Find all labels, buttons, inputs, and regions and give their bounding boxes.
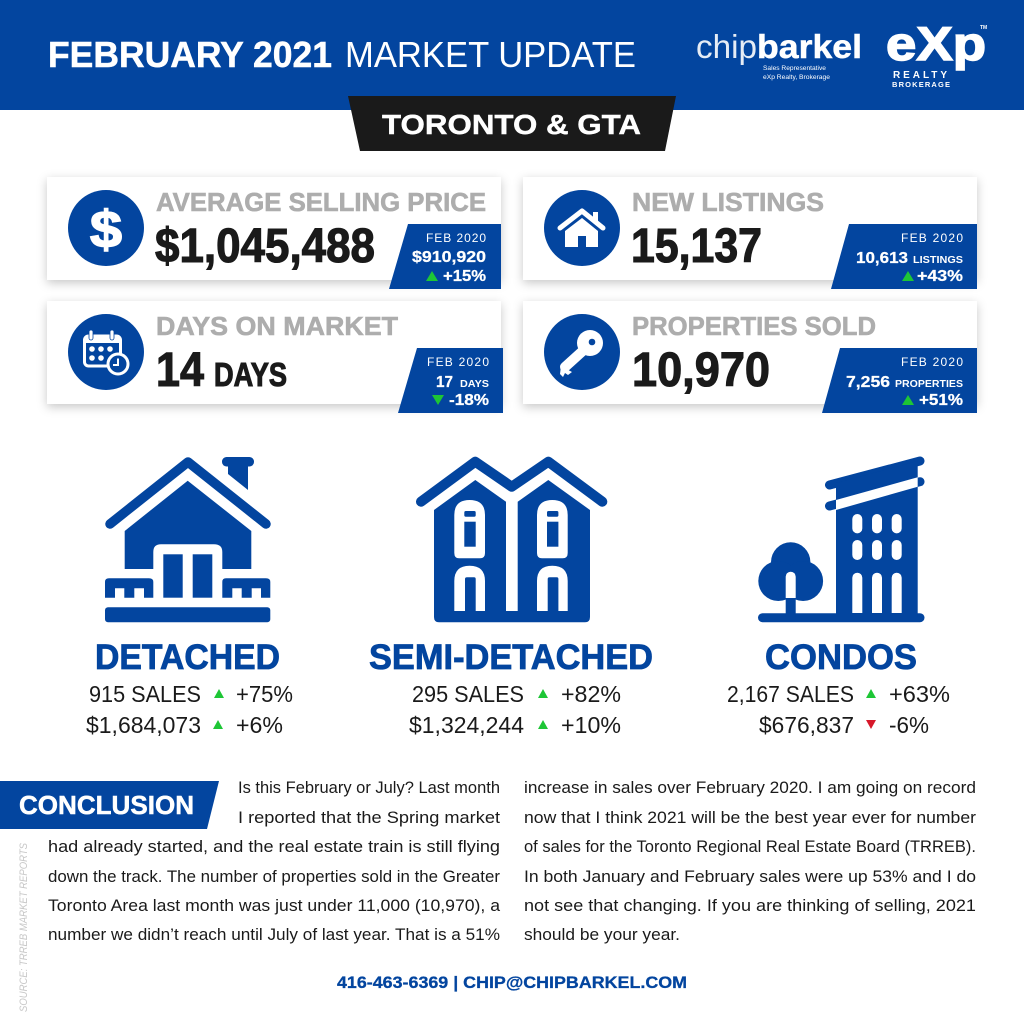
heading: SEMI-DETACHED (369, 638, 653, 677)
conclusion text: left column: Is this February or July? Last month (238, 779, 500, 797)
comparison tab: FEB 2020 (901, 231, 963, 245)
title (48, 34, 636, 75)
icon: condo building and tree (758, 461, 920, 618)
header band (0, 0, 1024, 110)
stats: detached (86, 638, 293, 738)
conclusion text: right column: should be your year. (524, 926, 680, 944)
icon: dollar (68, 190, 144, 266)
logo: chip barkel: eXp Realty, Brokerage (763, 75, 831, 81)
price row: -6% (889, 712, 929, 738)
comparison tab: +51% (919, 392, 963, 409)
label: AVERAGE SELLING PRICE (156, 189, 486, 217)
comparison tab: 17 (436, 374, 453, 391)
title: FEBRUARY 2021 (48, 34, 332, 75)
icon: calendar with clock (68, 314, 144, 390)
comparison tab (822, 348, 977, 413)
comparison tab: DAYS (460, 378, 489, 390)
stats: condos (727, 638, 950, 738)
comparison tab: +43% (917, 268, 963, 285)
logo: eXp realty: BROKERAGE (892, 80, 950, 89)
heading: DETACHED (95, 638, 280, 677)
sales row: 295 SALES (412, 681, 524, 707)
sales row: +63% (889, 681, 950, 707)
comparison tab: 10,613 (856, 250, 908, 267)
comparison tab: -18% (449, 392, 489, 409)
icon: house (544, 190, 620, 266)
value: 15,137 (631, 219, 762, 273)
label: DAYS ON MARKET (156, 313, 398, 341)
sales row: +75% (236, 681, 293, 707)
comparison tab (389, 224, 501, 289)
panel: average selling price (47, 177, 501, 289)
icon: key (544, 314, 620, 390)
comparison tab: FEB 2020 (427, 355, 489, 369)
price row: $1,684,073 (86, 712, 201, 738)
conclusion text: left column: number we didn’t reach until July of last year. That is a 51% (48, 926, 500, 944)
price row (86, 712, 283, 738)
price row (409, 712, 621, 738)
price row: $1,324,244 (409, 712, 524, 738)
value: 10,970 (632, 343, 770, 397)
price row: $676,837 (759, 712, 854, 738)
logo: eXp realty: TM (980, 25, 987, 31)
comparison tab: FEB 2020 (426, 231, 486, 245)
heading: CONDOS (765, 638, 917, 677)
icon: dollar: $ (90, 201, 122, 259)
stats: semi-detached (369, 638, 653, 738)
conclusion heading: CONCLUSION (19, 790, 194, 820)
conclusion text: right column: not see that changing. If you are thinking of selling, 2021 (524, 897, 976, 915)
logo: chip barkel (696, 28, 862, 81)
conclusion text: right column (524, 779, 977, 944)
value: 14 (156, 343, 204, 397)
logo: eXp realty (886, 17, 987, 89)
comparison tab: PROPERTIES (895, 378, 963, 390)
label: PROPERTIES SOLD (632, 313, 876, 341)
comparison tab: FEB 2020 (901, 355, 963, 369)
conclusion text: left column: Toronto Area last month was just under 11,000 (10,970), a (48, 897, 501, 915)
comparison tab (831, 224, 977, 289)
conclusion text: left column: I reported that the Spring market (238, 809, 500, 827)
conclusion text: left column: had already started, and the real estate train is still flying (48, 838, 500, 856)
source note: SOURCE: TRREB MARKET REPORTS (18, 842, 30, 1012)
logo: eXp realty: eXp (886, 17, 986, 70)
conclusion text: right column: In both January and February sales were up 53% and I do (524, 868, 976, 886)
comparison tab: $910,920 (412, 249, 486, 266)
icon: semi-detached house (421, 462, 602, 622)
icon: detached house (105, 457, 270, 622)
sales row: +82% (561, 681, 621, 707)
comparison tab: +15% (443, 268, 486, 285)
conclusion text: right column: increase in sales over February 2020. I am going on record (524, 779, 976, 797)
contact line: 416-463-6369 | CHIP@CHIPBARKEL.COM (337, 973, 687, 992)
comparison tab (398, 348, 503, 413)
sales row: 915 SALES (89, 681, 201, 707)
conclusion heading (0, 781, 219, 829)
conclusion text: right column: now that I think 2021 will be the best year ever for number (524, 809, 977, 827)
comparison tab: LISTINGS (913, 254, 963, 266)
price row: +10% (561, 712, 621, 738)
sales row (727, 681, 950, 707)
title: MARKET UPDATE (345, 34, 636, 75)
value: $1,045,488 (155, 219, 375, 273)
price row: +6% (236, 712, 283, 738)
value (156, 343, 287, 397)
banner: Toronto and GTA: TORONTO & GTA (382, 109, 641, 140)
conclusion text: left column (48, 779, 501, 944)
logo: chip barkel: Sales Representative (763, 66, 827, 72)
sales row (412, 681, 621, 707)
panel: new listings (523, 177, 977, 289)
value: DAYS (214, 356, 287, 393)
banner: Toronto and GTA (348, 96, 676, 151)
label: NEW LISTINGS (632, 189, 824, 217)
conclusion text: right column: of sales for the Toronto Regional Real Estate Board (TRREB). (524, 838, 976, 856)
logo: chip barkel: chip (696, 28, 757, 65)
logo: eXp realty: REALTY (893, 70, 947, 81)
panel: properties sold (523, 301, 977, 413)
sales row: 2,167 SALES (727, 681, 854, 707)
sales row (89, 681, 293, 707)
logo: chip barkel: barkel (757, 28, 862, 65)
panel: days on market (47, 301, 503, 413)
price row (759, 712, 929, 738)
conclusion text: left column: down the track. The number of properties sold in the Greater (48, 868, 501, 886)
comparison tab: 7,256 (846, 374, 890, 391)
